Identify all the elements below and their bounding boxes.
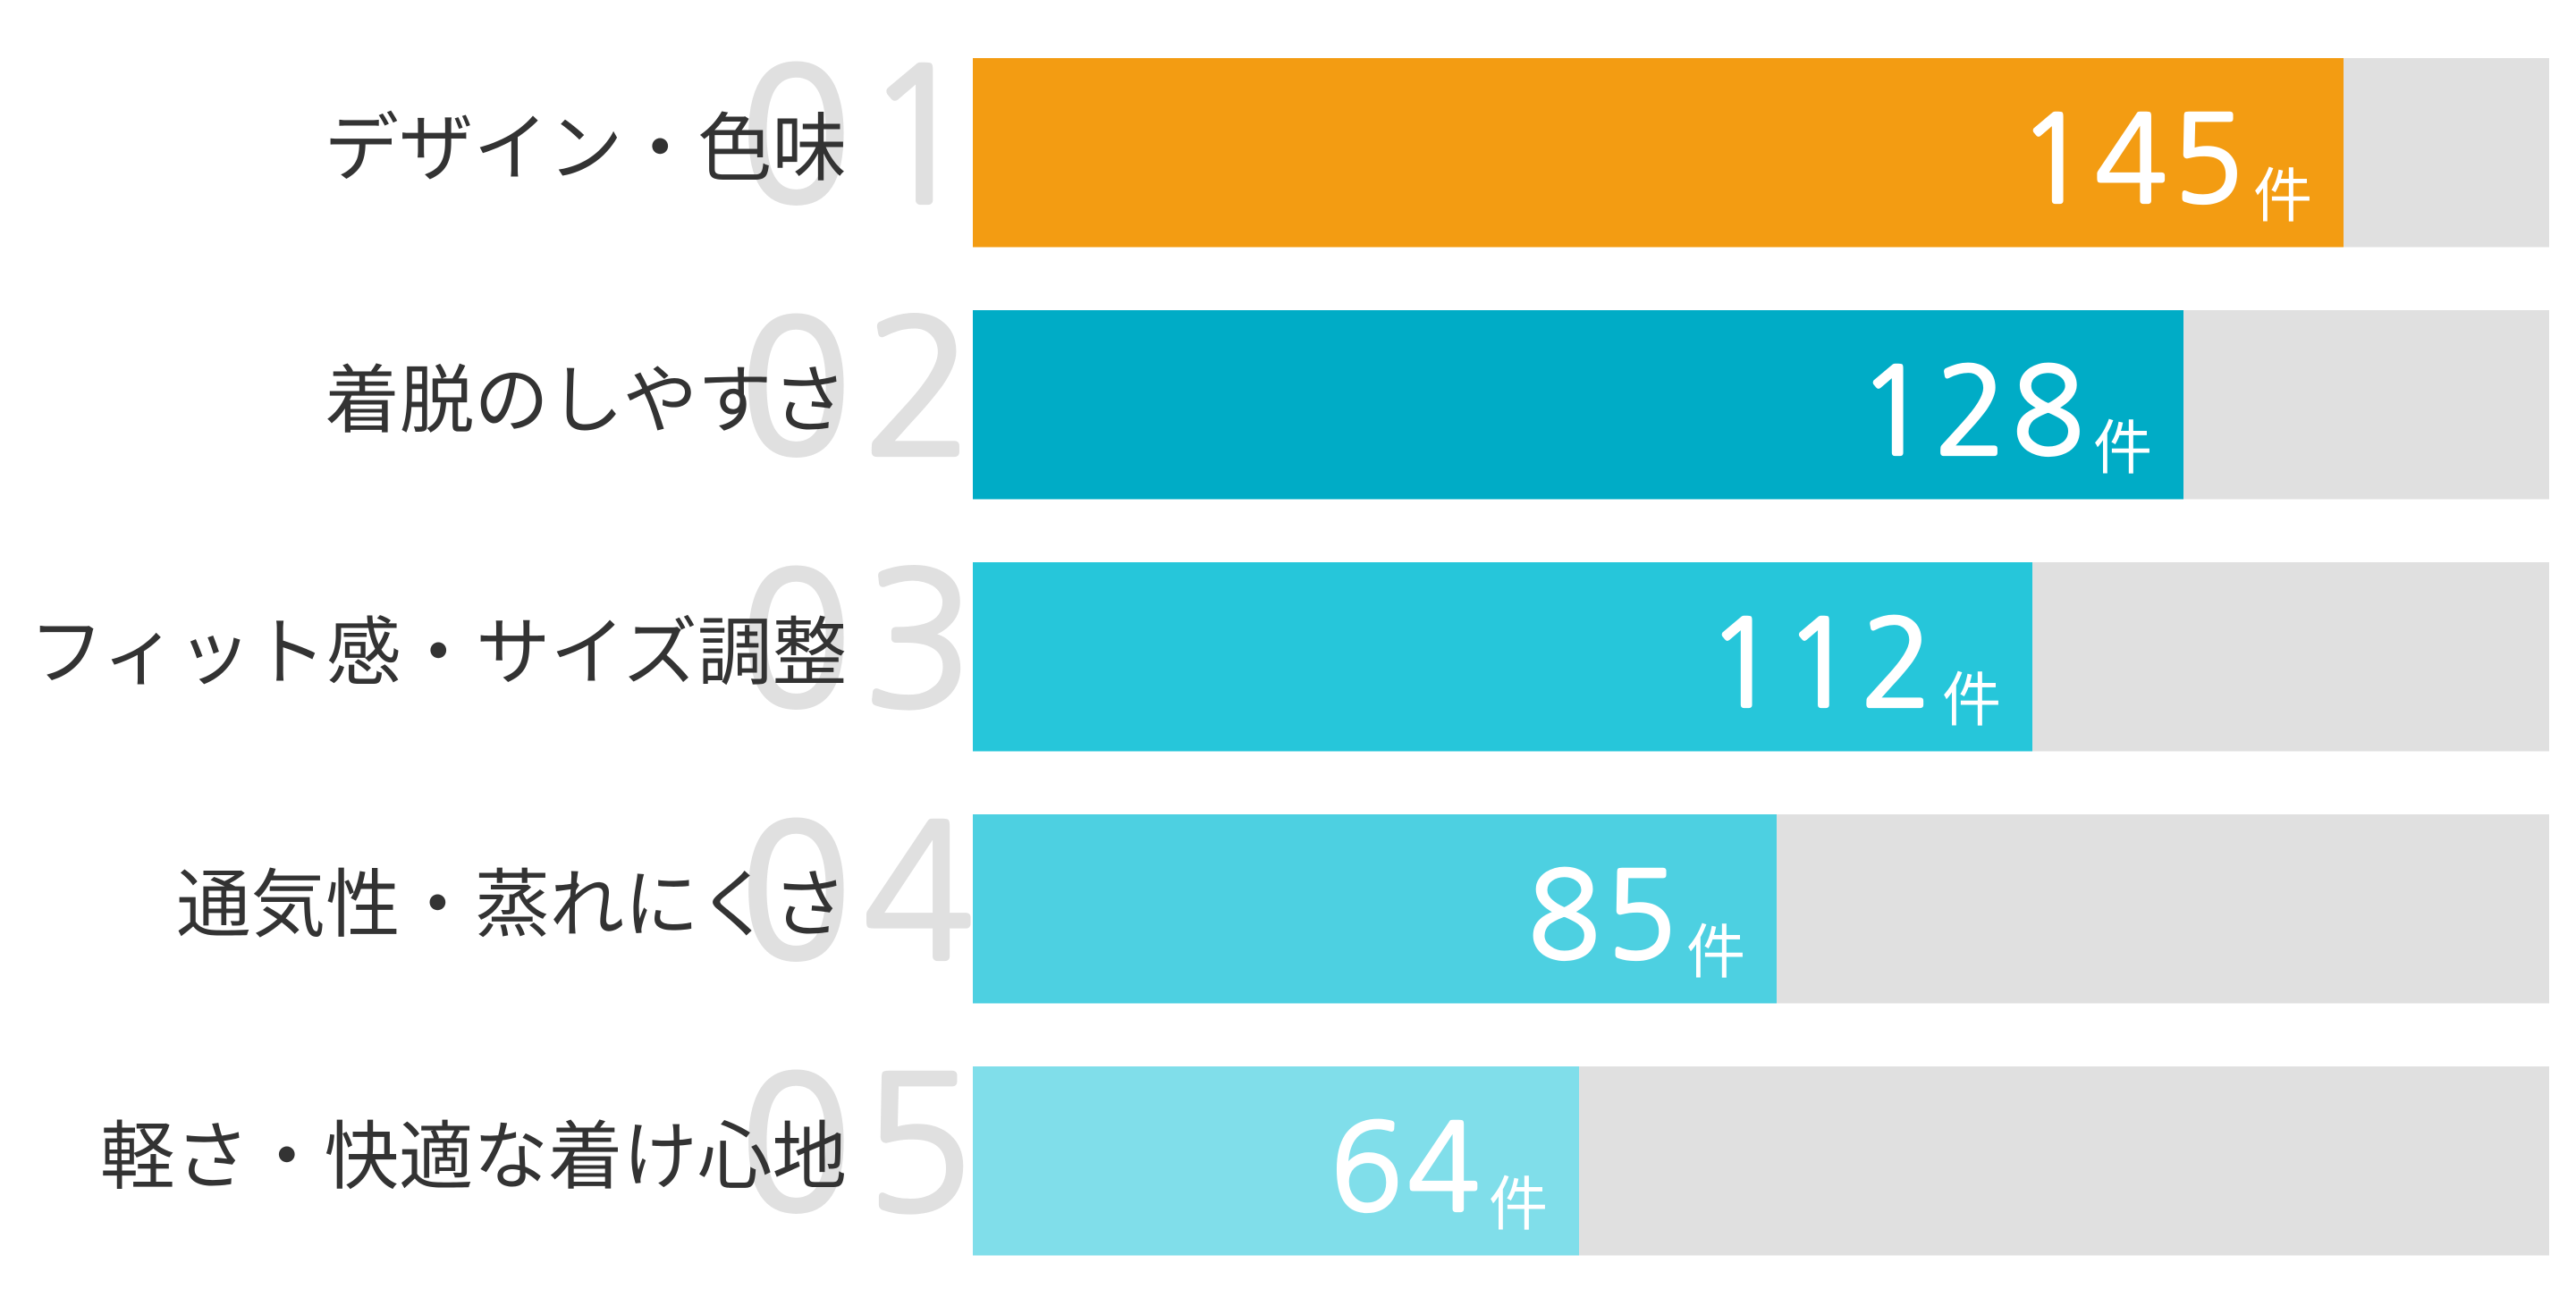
value 64: 64 bbox=[1330, 1108, 1484, 1228]
value 85: 85 bbox=[1528, 856, 1682, 976]
value 112: 112 bbox=[1706, 604, 1938, 724]
bar track 2 bbox=[973, 310, 2549, 499]
bar track 5 bbox=[973, 1066, 2549, 1255]
label 5: 軽さ・快適な着け心地 bbox=[100, 1115, 847, 1199]
bar fill 4: 85 bbox=[973, 814, 1777, 1003]
unit 1: 件 bbox=[2253, 163, 2312, 229]
label 1: デザイン・色味 bbox=[324, 106, 847, 190]
value 145: 145 bbox=[2017, 100, 2249, 220]
bar track 4 bbox=[973, 814, 2549, 1003]
bar fill 2: 128 bbox=[973, 310, 2183, 499]
bar fill 5: 64 bbox=[973, 1066, 1579, 1255]
unit 3: 件 bbox=[1942, 667, 2001, 733]
value 128: 128 bbox=[1857, 352, 2089, 472]
bar fill 1: 145 bbox=[973, 58, 2344, 247]
label 3: フィット感・サイズ調整 bbox=[30, 611, 847, 695]
rank number 03: 03 bbox=[739, 548, 985, 733]
row 4: breathability bbox=[176, 800, 2549, 1003]
label 2: 着脱のしやすさ bbox=[325, 358, 847, 442]
unit 4: 件 bbox=[1686, 919, 1745, 985]
label 4: 通気性・蒸れにくさ bbox=[176, 863, 847, 947]
bar track 1 bbox=[973, 58, 2549, 247]
bar track 3 bbox=[973, 562, 2549, 751]
row 3: fit and sizing bbox=[30, 548, 2549, 751]
rank number 05: 05 bbox=[739, 1052, 985, 1237]
rank number 02: 02 bbox=[739, 296, 985, 481]
row 1: design and color bbox=[324, 44, 2549, 247]
unit 2: 件 bbox=[2093, 415, 2152, 481]
bar fill 3: 112 bbox=[973, 562, 2032, 751]
unit 5: 件 bbox=[1489, 1171, 1548, 1237]
rank number 04: 04 bbox=[739, 800, 985, 985]
rank number 01: 01 bbox=[739, 44, 985, 229]
row 5: lightness and comfort bbox=[100, 1052, 2549, 1255]
row 2: ease of wearing bbox=[325, 296, 2549, 499]
